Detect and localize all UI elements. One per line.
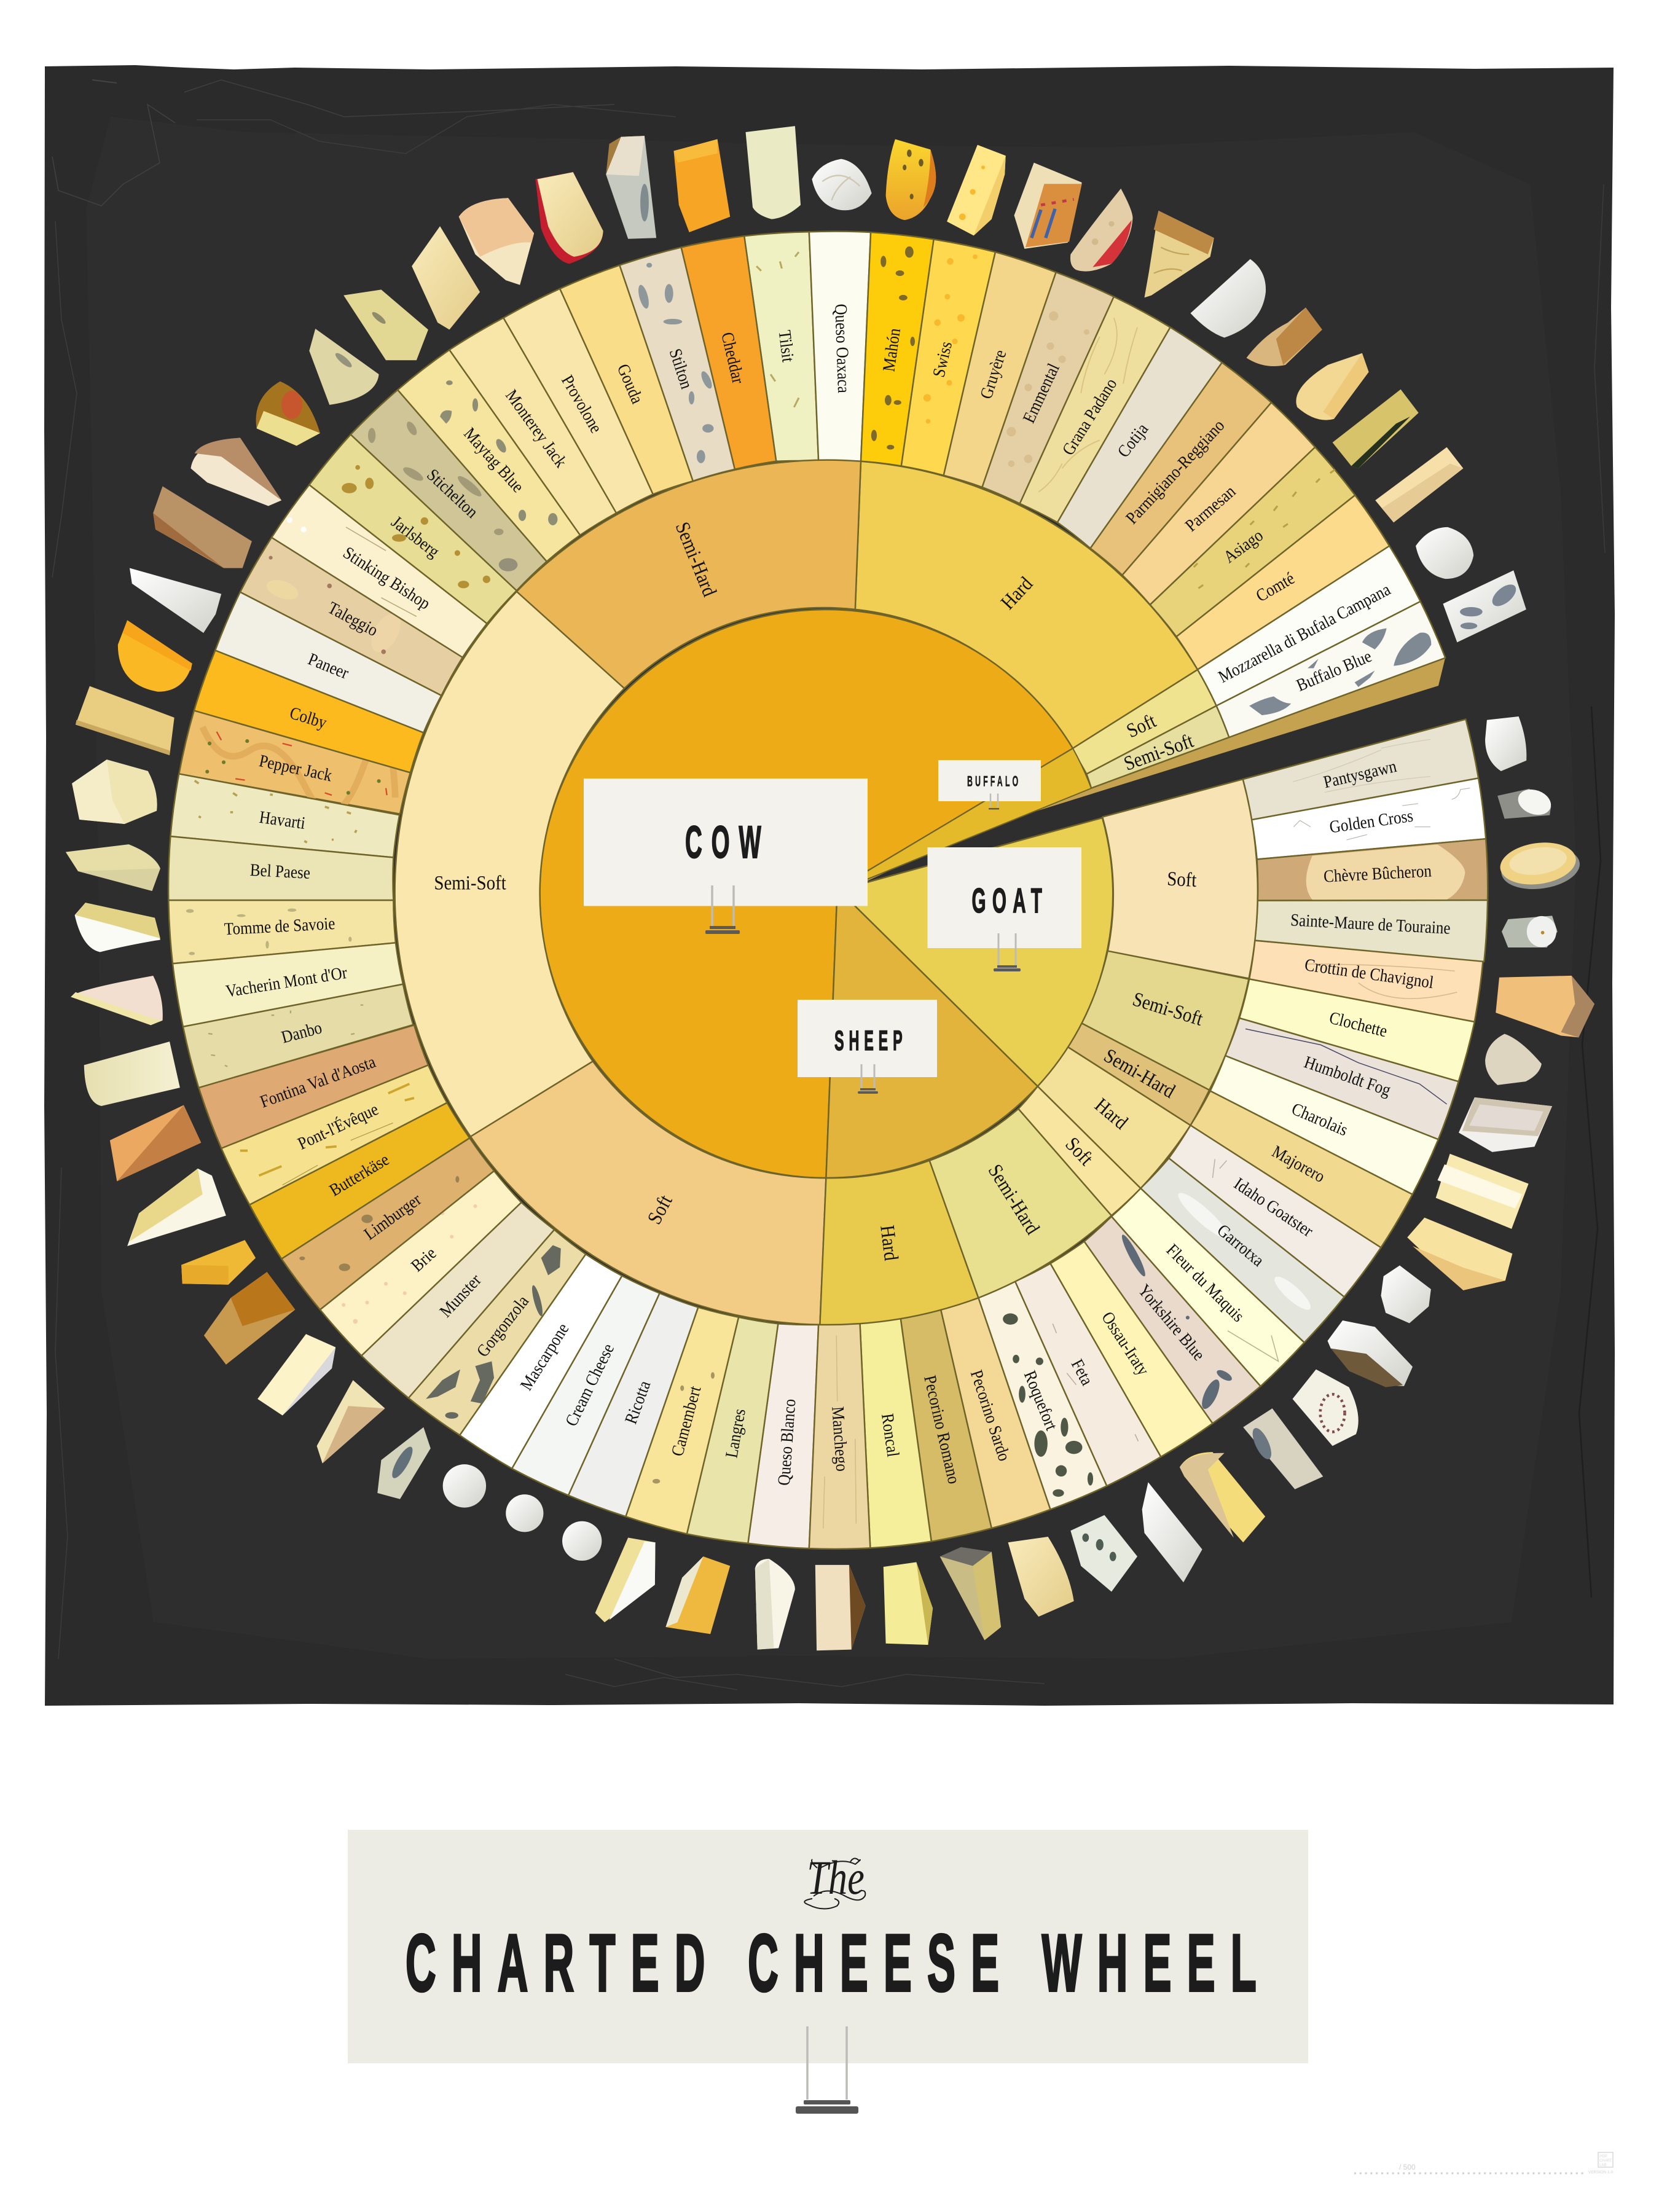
icon: grana padano [1144, 211, 1214, 297]
cheese: Ricotta: Ricotta [621, 1378, 654, 1427]
cheese: Provolone: Provolone [558, 372, 606, 436]
cheese: Monterey Jack [449, 318, 616, 535]
icon: gouda face [537, 172, 603, 257]
cheese: Roncal [860, 1317, 931, 1548]
cheese: Pepper Jack [179, 710, 410, 814]
type ring: sheep Soft: Soft [1061, 1132, 1098, 1170]
cheese: Mahon [861, 232, 934, 466]
icon: pecorino sardo [1008, 1537, 1074, 1617]
icon: mahon [886, 139, 936, 220]
cheese: Gouda [560, 265, 693, 494]
icon: swiss [947, 145, 1006, 235]
wheel: outer ring, top right cheeses [744, 231, 1445, 788]
footer edition mark and logo: CHART [1599, 2159, 1612, 2163]
card: goat [928, 847, 1081, 971]
cheese: Comte [1177, 495, 1389, 670]
cheese: Cream Cheese [512, 1276, 659, 1496]
type ring: cow Semi-Hard: Semi-Hard [671, 519, 721, 600]
cheese: Majorero: Majorero [1269, 1142, 1328, 1186]
cheese: Fleur du Maquis [1112, 1188, 1304, 1386]
cheese: Pecorino Romano [900, 1309, 992, 1542]
type ring: goat Semi-Hard: Semi-Hard [1100, 1044, 1180, 1103]
cheese: Cream Cheese: Cream Cheese [561, 1341, 618, 1429]
cheese: Monterey Jack: Monterey Jack [502, 386, 571, 471]
cheese: Golden Cross: Golden Cross [1328, 806, 1414, 837]
icon: humboldt fog [1459, 1097, 1552, 1152]
icon: munster [317, 1380, 385, 1464]
type ring: goat Soft [1102, 779, 1258, 978]
cheese: Stinking Bishop: Stinking Bishop [340, 543, 434, 613]
type ring: cow Semi-Soft: Semi-Soft [434, 871, 506, 894]
cheese: Feta: Feta [1067, 1356, 1097, 1389]
icon: mozzarella [1416, 527, 1473, 579]
footer edition mark and logo: POP [1599, 2155, 1607, 2159]
cheese: Parmesan [1123, 402, 1315, 605]
cheese: Cheddar [681, 236, 776, 469]
icon: idaho goatster [1381, 1266, 1431, 1324]
wheel: outer ring, left cheeses [168, 774, 413, 1088]
card: buffalo [938, 760, 1041, 810]
cheese: Roquefort: Roquefort [1020, 1368, 1062, 1433]
icon: butterkase [181, 1240, 256, 1285]
cheese: Feta [1015, 1263, 1161, 1486]
cheese: Buffalo Blue: Buffalo Blue [1293, 646, 1375, 695]
cheese illustrations: lower left arc [71, 976, 795, 1650]
cheese: Sainte-Maure de Touraine: Sainte-Maure de Touraine [1290, 910, 1451, 938]
icon: danbo [84, 1041, 180, 1106]
icon: pecorino romano [940, 1547, 1001, 1640]
cheese: Pantysgawn [1243, 720, 1478, 820]
icon: asiago [1333, 390, 1419, 468]
icon: tilsit [746, 126, 801, 219]
icon: emmental [1070, 189, 1132, 272]
cheese: Butterkase: Butterkäse [326, 1150, 393, 1200]
type ring: cow Soft [471, 1061, 826, 1325]
cheese: Havarti: Havarti [258, 807, 307, 833]
icon: gouda [535, 172, 603, 264]
icon: pantysgawn [1485, 716, 1526, 771]
cheese: Provolone [503, 289, 653, 513]
cheese illustrations: right arc lower [1328, 1218, 1512, 1387]
cheese: Manchego [809, 1323, 870, 1549]
cheese: Roncal: Roncal [878, 1412, 903, 1458]
cheese: Maytag Blue [398, 350, 580, 562]
cheese: Queso Oaxaca [809, 231, 871, 461]
cheese: Vacherin Mont d'Or [173, 943, 403, 1027]
cheese: Stilton: Stilton [665, 346, 697, 391]
icon: chevre bucheron [1497, 838, 1582, 894]
footer edition mark and logo: / 500 [1399, 2163, 1416, 2171]
icon: tomme de savoie [75, 903, 160, 952]
cheese: Emmental: Emmental [1019, 360, 1063, 426]
type ring: sheep Soft [1018, 1086, 1140, 1215]
cheese: Queso Oaxaca: Queso Oaxaca [831, 304, 854, 393]
cheese illustrations: top right arc [812, 139, 1526, 642]
cheese: Mascarpone: Mascarpone [516, 1320, 573, 1394]
cheese: Bel Paese [168, 836, 393, 900]
cheese: Tomme de Savoie: Tomme de Savoie [224, 913, 335, 939]
cheese: Mozzarella di Bufala Campana: Mozzarella di Bufala Campana [1215, 579, 1394, 686]
wheel: outer ring, lower right cheeses [809, 941, 1483, 1549]
title script: The: The [807, 1852, 865, 1905]
icon: charolais [1436, 1154, 1529, 1229]
cheese: Queso Blanco [748, 1324, 818, 1548]
cheese: Vacherin Mont d'Or: Vacherin Mont d'Or [224, 962, 348, 1001]
cheese: Asiago [1150, 447, 1355, 637]
cheese: Clochette [1239, 979, 1475, 1081]
cheese: Tilsit [744, 232, 818, 461]
cheese: Crottin de Chavignol [1249, 941, 1483, 1022]
icon: maytag blue [343, 289, 428, 360]
icon: camembert [595, 1538, 656, 1622]
type ring: cow Semi-Soft [395, 592, 624, 1137]
icon: colby [118, 620, 192, 692]
type ring: sheep Hard [820, 1161, 978, 1325]
cheese: Butterkase [249, 1103, 469, 1259]
type ring: sheep Hard: Hard [876, 1224, 903, 1262]
cheese: Gouda: Gouda [613, 361, 648, 407]
icon: fontina [110, 1105, 201, 1181]
cheese: Grana Padano: Grana Padano [1058, 375, 1121, 458]
cheese: Idaho Goatster [1169, 1125, 1381, 1297]
icon: gorgonzola [377, 1427, 431, 1499]
icon: langres [665, 1556, 730, 1634]
cheese: Tilsit: Tilsit [775, 329, 798, 364]
cheese: Garrotxa: Garrotxa [1214, 1220, 1268, 1270]
type ring: buffalo Semi-Soft: Semi-Soft [1121, 729, 1196, 775]
center circle: goat sector [837, 818, 1113, 1086]
icon: stilton [606, 136, 656, 239]
cheese: Gruyere: Gruyère [976, 347, 1010, 401]
cheese: Pecorino Romano: Pecorino Romano [920, 1373, 964, 1486]
cheese: Fontina Val d'Aosta [198, 1025, 428, 1148]
type ring: cow Hard [855, 461, 1198, 749]
title heading: CHARTED CHEESE WHEEL [406, 1918, 1257, 2009]
type ring: buffalo Semi-Soft [1086, 706, 1229, 788]
cheese: Limburger [281, 1138, 494, 1309]
cheese illustrations: top left arc [76, 126, 801, 755]
panel: dark slate background [44, 65, 1615, 1706]
icon: queso blanco [755, 1559, 795, 1650]
cheese: Limburger: Limburger [360, 1190, 425, 1244]
cheese: Langres [687, 1317, 778, 1543]
icon: parmesan [1296, 353, 1369, 420]
cheese: Buffalo Blue [1217, 602, 1445, 737]
type ring: cow Semi-Hard [517, 460, 861, 688]
cheese: Stilton [619, 248, 735, 481]
card: goat: GOAT [972, 881, 1042, 920]
cheese: Gorgonzola [409, 1230, 586, 1435]
cheese: Munster: Munster [436, 1270, 485, 1321]
icon: manchego [815, 1565, 866, 1650]
icon: feta [1142, 1482, 1202, 1582]
cheese: Chevre Bucheron: Chèvre Bûcheron [1323, 861, 1432, 886]
cheese: Cheddar: Cheddar [718, 330, 748, 385]
title card stand [796, 2026, 858, 2114]
footer edition mark and logo [1354, 2152, 1613, 2175]
type ring: goat Hard [1038, 1046, 1190, 1188]
cheese: Gorgonzola: Gorgonzola [473, 1292, 533, 1360]
card: sheep: SHEEP [834, 1026, 903, 1056]
cheese: Paneer: Paneer [305, 649, 351, 683]
icon: crottin [1496, 976, 1594, 1037]
cheese: Munster [361, 1202, 554, 1398]
cheese: Danbo: Danbo [279, 1018, 324, 1047]
cheese: Cotija: Cotija [1113, 419, 1152, 461]
icon: ricotta [562, 1521, 602, 1561]
icon: fleur du maquis [1293, 1370, 1359, 1446]
type ring: cow Soft: Soft [643, 1191, 677, 1228]
icon: havarti [72, 759, 157, 824]
type ring: goat Semi-Hard [1067, 1023, 1209, 1125]
icon: cheddar [673, 139, 730, 232]
center circle: sheep sector [826, 888, 1038, 1178]
cheese: Pecorino Sardo: Pecorino Sardo [967, 1368, 1014, 1464]
icon: paneer [130, 568, 221, 633]
wheel: outer ring, lower left cheeses [198, 1025, 826, 1548]
icon: roquefort [1070, 1515, 1137, 1592]
cheese: Tomme de Savoie [168, 900, 396, 963]
cheese: Queso Blanco: Queso Blanco [774, 1398, 799, 1486]
type ring: buffalo Soft: Soft [1123, 709, 1159, 742]
cheese: Grana Padano [1020, 297, 1171, 522]
wheel: outer ring, top left cheeses [179, 236, 861, 1137]
cheese: Stichelton [351, 390, 547, 590]
cheese: Majorero [1190, 1091, 1413, 1247]
icon: buffalo blue [1443, 570, 1526, 642]
cheese: Idaho Goatster: Idaho Goatster [1231, 1174, 1317, 1241]
cheese: Brie [320, 1171, 521, 1355]
wheel: outer ring, goat cheeses top [1102, 720, 1488, 978]
icon: gruyere [1014, 163, 1082, 249]
cheese: Roquefort [978, 1281, 1107, 1510]
type ring: cow Hard: Hard [996, 572, 1037, 614]
cheese: Bel Paese: Bel Paese [249, 860, 311, 882]
card: buffalo: BUFFALO [967, 774, 1018, 790]
cheese: Parmesan: Parmesan [1181, 481, 1239, 535]
cheese: Stinking Bishop [272, 485, 487, 657]
cheese: Charolais [1210, 1056, 1438, 1194]
card: sheep [798, 1000, 937, 1094]
cheese: Parmigiano-Reggiano [1090, 363, 1271, 575]
title card [348, 1830, 1308, 2114]
cheese: Danbo [183, 984, 413, 1088]
cheese: Pepper Jack: Pepper Jack [257, 751, 334, 785]
cheese: Clochette: Clochette [1327, 1008, 1389, 1041]
icon: taleggio [153, 486, 252, 568]
cheese: Pecorino Sardo [941, 1298, 1050, 1528]
cheese: Havarti [170, 774, 399, 858]
cheese: Sainte-Maure de Touraine [1255, 900, 1488, 962]
icon: mascarpone [443, 1464, 486, 1508]
icon: provolone [459, 198, 534, 285]
cheese: Pantysgawn: Pantysgawn [1322, 756, 1398, 792]
card: cow: COW [685, 818, 761, 868]
type ring: goat Semi-Soft [1081, 951, 1249, 1090]
icon: bel paese [66, 844, 160, 891]
cheese: Colby: Colby [288, 703, 329, 732]
footer edition mark and logo: LAB [1599, 2163, 1606, 2167]
cheese illustrations: right arc upper [1436, 716, 1594, 1229]
icon: stinking bishop [190, 437, 281, 506]
cheese: Camembert: Camembert [667, 1384, 705, 1458]
cheese: Humboldt Fog [1225, 1018, 1459, 1139]
center circle: cow sector [540, 610, 1073, 1178]
cheese: Paneer [215, 592, 441, 732]
icon: sainte-maure [1502, 916, 1558, 947]
type ring: buffalo Soft [1072, 670, 1217, 774]
cheese: Humboldt Fog: Humboldt Fog [1302, 1052, 1394, 1100]
cheese: Mahon: Mahón [879, 327, 904, 373]
center circle: buffalo sector [867, 748, 1091, 879]
icon: pepper jack [76, 686, 175, 755]
cheese: Taleggio [240, 538, 463, 696]
icon: golden cross [1497, 785, 1555, 819]
cheese: Yorkshire Blue [1084, 1217, 1261, 1424]
cheese: Ricotta [568, 1293, 698, 1516]
icon: stichelton [309, 329, 379, 405]
icon: parmigiano-reggiano [1247, 308, 1322, 366]
cheese: Gruyere [944, 252, 1056, 487]
cheese: Camembert [626, 1308, 739, 1534]
icon: monterey jack [412, 226, 480, 329]
icon: ossau-iraty [1180, 1452, 1265, 1542]
cheese: Golden Cross [1252, 778, 1486, 859]
type ring: goat Hard: Hard [1091, 1093, 1132, 1134]
cheese: Garrotxa [1140, 1158, 1344, 1343]
cheese: Ossau-Iraty [1050, 1241, 1212, 1457]
cheese: Langres: Langres [721, 1407, 749, 1459]
icon: garrotxa [1328, 1320, 1413, 1387]
cheese illustrations: lower right arc [815, 1370, 1359, 1650]
icon: queso oaxaca [812, 159, 872, 210]
cheese: Fontina Val d'Aosta: Fontina Val d'Aosta [257, 1051, 378, 1112]
cheese: Yorkshire Blue: Yorkshire Blue [1134, 1281, 1209, 1364]
cheese: Fleur du Maquis: Fleur du Maquis [1163, 1240, 1249, 1326]
cheese: Colby [194, 650, 423, 772]
cheese: Asiago: Asiago [1220, 525, 1266, 567]
footer edition mark and logo: VERSION 1.0 [1588, 2170, 1613, 2175]
icon: jarlsberg [256, 382, 320, 446]
cheese: Pont-l'Eveque: Pont-l'Évêque [294, 1099, 382, 1153]
icon: clochette [1485, 1034, 1542, 1085]
cheese: Parmigiano-Reggiano: Parmigiano-Reggiano [1122, 415, 1228, 528]
icon: comte [1375, 447, 1463, 522]
cheese: Swiss: Swiss [928, 340, 956, 379]
cheese: Taleggio: Taleggio [324, 598, 381, 640]
card: cow [584, 779, 868, 934]
cheese: Swiss [901, 240, 995, 476]
cheese: Manchego: Manchego [828, 1406, 852, 1472]
type ring: goat Semi-Soft: Semi-Soft [1130, 987, 1206, 1030]
icon: cream cheese [506, 1494, 543, 1532]
icon: brie [257, 1334, 335, 1416]
cheese: Maytag Blue: Maytag Blue [460, 423, 528, 496]
cheese: Mozzarella di Bufala Campana [1198, 546, 1421, 706]
icon: cotija [1190, 259, 1266, 337]
icon: yorkshire blue [1243, 1408, 1323, 1489]
type ring: sheep Semi-Hard: Semi-Hard [984, 1160, 1045, 1239]
icon: vacherin mont d'or [71, 976, 163, 1025]
icon: limburger [204, 1272, 295, 1365]
cheese: Stichelton: Stichelton [423, 465, 482, 522]
cheese: Cotija [1057, 327, 1222, 548]
icon: majorero [1407, 1218, 1512, 1290]
cheese: Emmental [982, 272, 1114, 504]
cheese: Jarlsberg [309, 434, 517, 624]
icon: roncal [884, 1562, 933, 1645]
cheese: Comte: Comté [1252, 568, 1298, 606]
type ring: sheep Semi-Hard [930, 1109, 1112, 1298]
cheese: Brie: Brie [407, 1243, 440, 1276]
cheese: Jarlsberg: Jarlsberg [388, 512, 444, 561]
icon: pont l'eveque [127, 1169, 226, 1246]
cheese: Charolais: Charolais [1289, 1099, 1351, 1140]
cheese: Chevre Bucheron [1257, 839, 1488, 901]
cheese illustrations: left arc [66, 759, 160, 952]
cheese: Crottin de Chavignol: Crottin de Chavignol [1303, 955, 1435, 992]
type ring: goat Soft: Soft [1167, 868, 1198, 891]
cheese: Pont-l'Eveque [221, 1065, 447, 1205]
wheel: buffalo tan side wall [867, 658, 1445, 881]
cheese: Mascarpone [460, 1254, 622, 1469]
cheese: Ossau-Iraty: Ossau-Iraty [1098, 1308, 1153, 1379]
